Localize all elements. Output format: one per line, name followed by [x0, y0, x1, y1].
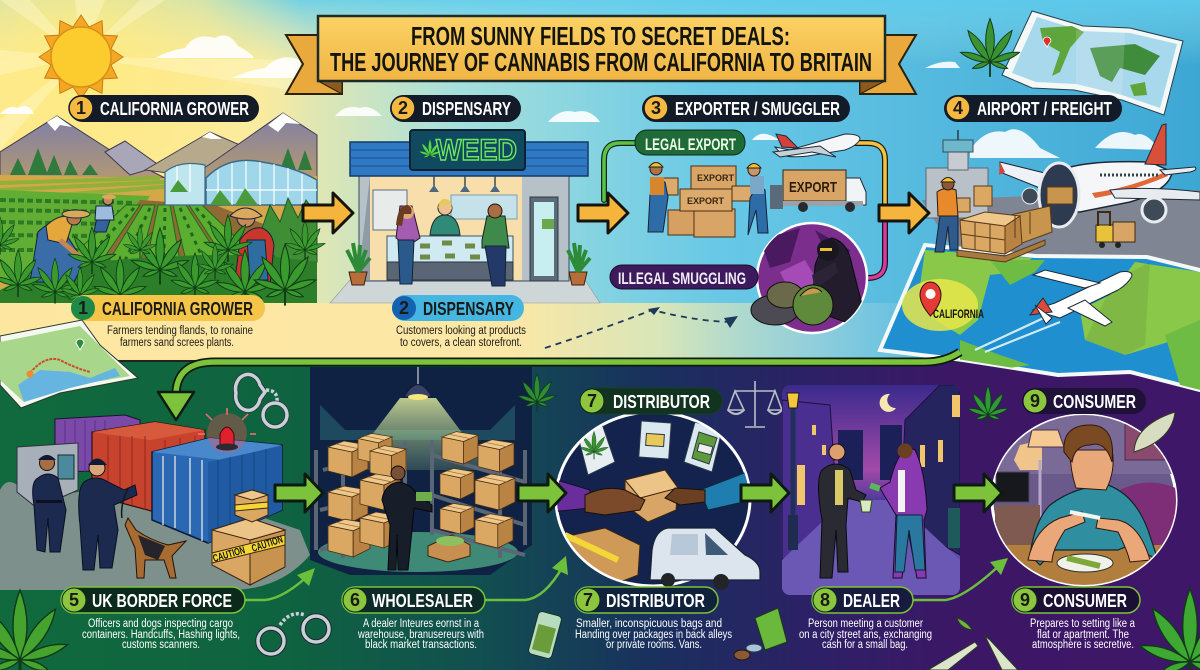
icon: export truck: [770, 170, 866, 212]
route line to lower half: [158, 352, 960, 420]
neon sign: WEED: [436, 134, 517, 167]
top label 7: DISTRIBUTOR: [613, 391, 710, 412]
text: dealer description: on a city street ans, exchanging: [799, 629, 932, 641]
label 8: Dealer: 8: [820, 590, 830, 610]
hooded figure: [812, 238, 866, 322]
top label 9: CONSUMER: [1053, 391, 1136, 412]
exporter boxes and workers: EXPORT: [697, 173, 735, 183]
top label 4: Airport / Freight: AIRPORT / FREIGHT: [977, 98, 1113, 119]
text: border force description: [82, 618, 240, 651]
cargo plane: [999, 124, 1200, 227]
man with money: [382, 466, 432, 570]
top-right world map with leaf: [1002, 11, 1183, 115]
top descriptions: [71, 295, 265, 349]
map label: CALIFORNIA: [933, 309, 984, 321]
potted plants: [347, 243, 590, 285]
panel: airport cargo, worker and forklift: [935, 178, 1135, 262]
exporter boxes and workers: EXPORT: [687, 196, 725, 206]
label 7: Distributor: [575, 587, 718, 613]
text: consumer description: flat or apartment. The: [1037, 629, 1129, 641]
text: consumer description: atmosphere is secretive.: [1032, 639, 1134, 651]
text: dealer description: cash for a small bag.: [822, 639, 908, 651]
blue container: [152, 438, 282, 543]
text: dealer description: [799, 618, 932, 651]
text: border force description: Officers and dogs inspecting cargo: [88, 618, 233, 630]
tarmac: [922, 190, 1200, 275]
label 5: UK Border Force: 5: [69, 590, 79, 610]
lower box with tape: [566, 528, 640, 581]
lamp light cone: [345, 398, 490, 470]
label 5: UK Border Force: [61, 587, 245, 613]
customer figure: [880, 444, 927, 578]
worker right: [747, 164, 768, 235]
panel: airport backdrop and cargo plane: [922, 124, 1200, 275]
worker left: [648, 162, 668, 232]
foreground green base: [0, 255, 317, 303]
awning: [350, 142, 588, 176]
dealer figure: [818, 444, 866, 578]
greenhouses: [165, 160, 317, 205]
top label 1: California Grower: [69, 95, 259, 122]
caption 1 California Grower: [71, 295, 265, 321]
bags: [575, 418, 722, 475]
foreground cannabis plants: [0, 215, 326, 308]
ground: [0, 480, 310, 590]
scanner: [17, 443, 78, 508]
dashed route arrow: [545, 307, 738, 348]
icon: sun: [39, 15, 123, 99]
icon: leaf by consumer: [967, 386, 1009, 425]
caption 2 dispensary: 2: [399, 298, 409, 318]
arrow: dispensary to exporter: [578, 193, 628, 233]
caption 2 dispensary: DISPENSARY: [423, 298, 515, 319]
counter: [387, 236, 513, 280]
icon: handcuffs top: [236, 374, 287, 427]
customer right: [482, 204, 509, 286]
customer left: [396, 205, 420, 284]
van: [650, 528, 760, 590]
label 6: Wholesaler: WHOLESALER: [372, 590, 473, 611]
door: [530, 197, 558, 281]
arrow: distributor to dealer: [741, 474, 789, 512]
top label 7: [580, 388, 722, 414]
top label 7: 7: [587, 391, 597, 411]
label: Legal Export: LEGAL EXPORT: [645, 135, 736, 154]
caption 1 California Grower: CALIFORNIA GROWER: [102, 298, 253, 319]
farmer middle: [94, 194, 116, 232]
text: distributor description: [575, 618, 732, 651]
panel: distributor circle: [550, 412, 760, 590]
top label 1: California Grower: 1: [76, 98, 86, 118]
label 7: Distributor: DISTRIBUTOR: [606, 590, 705, 611]
icon: leaf top right: [960, 19, 1020, 77]
icon: bud: [1134, 412, 1175, 452]
panel: UK border force: [0, 408, 310, 590]
text: wholesaler description: black market transactions.: [365, 639, 477, 651]
text: consumer description: [1030, 618, 1135, 651]
label 6: Wholesaler: [342, 587, 485, 613]
text: dealer description: Person meeting a customer: [808, 618, 923, 630]
connector curves: [245, 562, 1003, 600]
text: Customers looking at products: [396, 325, 526, 337]
panel: warehouse wholesaler: [310, 367, 532, 575]
dog: [125, 518, 186, 578]
top descriptions: Farmers tending flands, to ronaine: [107, 325, 253, 337]
exporter boxes and workers: [648, 162, 768, 237]
top label 4: Airport / Freight: 4: [953, 98, 963, 118]
icon: scales of justice: [728, 381, 782, 427]
icon: export truck: EXPORT: [789, 179, 837, 196]
icon: leaf bottom left: [0, 590, 69, 670]
top label 9: 9: [1030, 391, 1040, 411]
red container: [92, 422, 205, 512]
text: border force description: containers. Handcuffs, Hashing lights,: [82, 629, 240, 641]
bushes right: [258, 198, 317, 262]
flight trail: [975, 315, 1060, 352]
hands and parcel: [585, 470, 705, 522]
arrow: dealer to consumer: [954, 474, 1002, 512]
caution boxes: [212, 490, 285, 585]
icon: leaf by warehouse: [517, 374, 557, 412]
purple container: [55, 415, 140, 472]
label 9: Consumer: [1012, 587, 1140, 613]
icon: plane top: [773, 134, 860, 157]
label 8: Dealer: DEALER: [843, 590, 900, 611]
label 9: Consumer: 9: [1020, 590, 1030, 610]
icon: leaf bottom right: [1138, 588, 1200, 670]
label 7: Distributor: 7: [583, 590, 593, 610]
icon: jar: [528, 611, 562, 659]
top label 3: Exporter / Smuggler: [642, 95, 850, 122]
lamps: [434, 176, 495, 186]
box of cash: [428, 535, 470, 562]
label 8: Dealer: [812, 587, 913, 613]
caption 2 dispensary: [392, 295, 524, 321]
text: wholesaler description: A dealer Inteures eornst in a: [363, 618, 479, 630]
panel: consumer circle: [990, 414, 1180, 590]
panel: farm scene: [0, 113, 326, 308]
crop rows: [36, 205, 290, 295]
background: sky and fields top half: [0, 0, 1200, 360]
worker: [935, 178, 958, 252]
neon sign: [410, 130, 525, 170]
text: wholesaler description: [357, 618, 484, 651]
text: distributor description: or private rooms. Vans.: [606, 639, 702, 651]
title banner: THE JOURNEY OF CANNABIS FROM CALIFORNIA TO BRITAIN: [330, 49, 872, 77]
top label 2: Dispensary: DISPENSARY: [422, 98, 511, 119]
top label 1: California Grower: CALIFORNIA GROWER: [100, 98, 249, 119]
arrow: border force to wholesaler: [275, 474, 323, 512]
exchange: bag and cash: [860, 482, 881, 512]
pavement: [330, 280, 600, 303]
decorative clouds: [0, 35, 1160, 158]
panel: UK border force: CAUTION: [250, 534, 284, 555]
budtender: [430, 199, 460, 235]
connector arrowheads: [297, 556, 1008, 586]
officer left: [33, 455, 66, 552]
panel: dispensary storefront: [330, 130, 600, 303]
title banner: FROM SUNNY FIELDS TO SECRET DEALS:: [411, 23, 790, 51]
caption 1 California Grower: 1: [78, 298, 88, 318]
text: to covers, a clean storefront.: [400, 337, 522, 349]
shelf and screen: [373, 190, 407, 230]
sleeves: [557, 480, 590, 512]
label: Illegal Smuggling: ILLEGAL SMUGGLING: [618, 269, 746, 288]
arrow: grower to dispensary: [303, 193, 353, 233]
top label 3: Exporter / Smuggler: 3: [651, 98, 661, 118]
farmer left: [30, 210, 90, 282]
text: consumer description: Prepares to setting like a: [1030, 618, 1135, 630]
leash: [122, 488, 128, 518]
forklift: [1096, 212, 1135, 248]
icon: green bag and coins: [734, 608, 787, 660]
icon: location pin: [920, 282, 941, 316]
top descriptions: farmers sand screes plants.: [120, 337, 234, 349]
panel: UK border force: CAUTION: [212, 544, 247, 565]
pallets of boxes: [952, 186, 1052, 262]
terminal and tower: [926, 130, 988, 218]
smuggler bags: [751, 282, 833, 325]
label 9: Consumer: CONSUMER: [1043, 590, 1127, 611]
icon: plane on map: [1030, 270, 1132, 326]
farmer right: [230, 208, 274, 285]
left shelves: [316, 433, 406, 558]
text: distributor description: Smaller, inconspicuous bags and: [576, 618, 722, 630]
top label 3: Exporter / Smuggler: EXPORTER / SMUGGLER: [675, 98, 840, 119]
background: dark lower half: [0, 362, 1200, 670]
route lines: legal and illegal: [604, 143, 885, 278]
officer right: [79, 458, 137, 570]
top label 2: Dispensary: 2: [398, 98, 408, 118]
panel: world map with flight: [880, 245, 1200, 390]
field background: [0, 175, 317, 303]
panel: illegal smuggling circle: [751, 223, 867, 333]
top label 9: [1022, 388, 1146, 414]
right shelves: [432, 432, 525, 558]
text: distributor description: Handing over packages in back alleys: [575, 629, 732, 641]
top label 2: Dispensary: [390, 95, 521, 122]
arrow: exporter to airport: [879, 193, 929, 233]
title banner: [286, 16, 916, 94]
icon: handcuffs bottom: [258, 614, 329, 654]
mountains: [0, 113, 317, 185]
lamp post: [787, 393, 799, 550]
label: Illegal Smuggling: [610, 265, 758, 289]
top label 4: Airport / Freight: [944, 95, 1122, 122]
icon: siren: [198, 408, 256, 453]
label: Legal Export: [635, 130, 745, 155]
label 6: Wholesaler: 6: [350, 590, 360, 610]
panel: dealer night street: [782, 385, 960, 595]
text: wholesaler description: warehouse, branusereurs with: [357, 629, 484, 641]
icon: joints: [928, 618, 1018, 670]
icon: road map bottom left: [0, 320, 138, 408]
arrow: wholesaler to distributor: [518, 474, 566, 512]
text: border force description: customs scanners.: [122, 639, 200, 651]
label 5: UK Border Force: UK BORDER FORCE: [92, 590, 232, 611]
